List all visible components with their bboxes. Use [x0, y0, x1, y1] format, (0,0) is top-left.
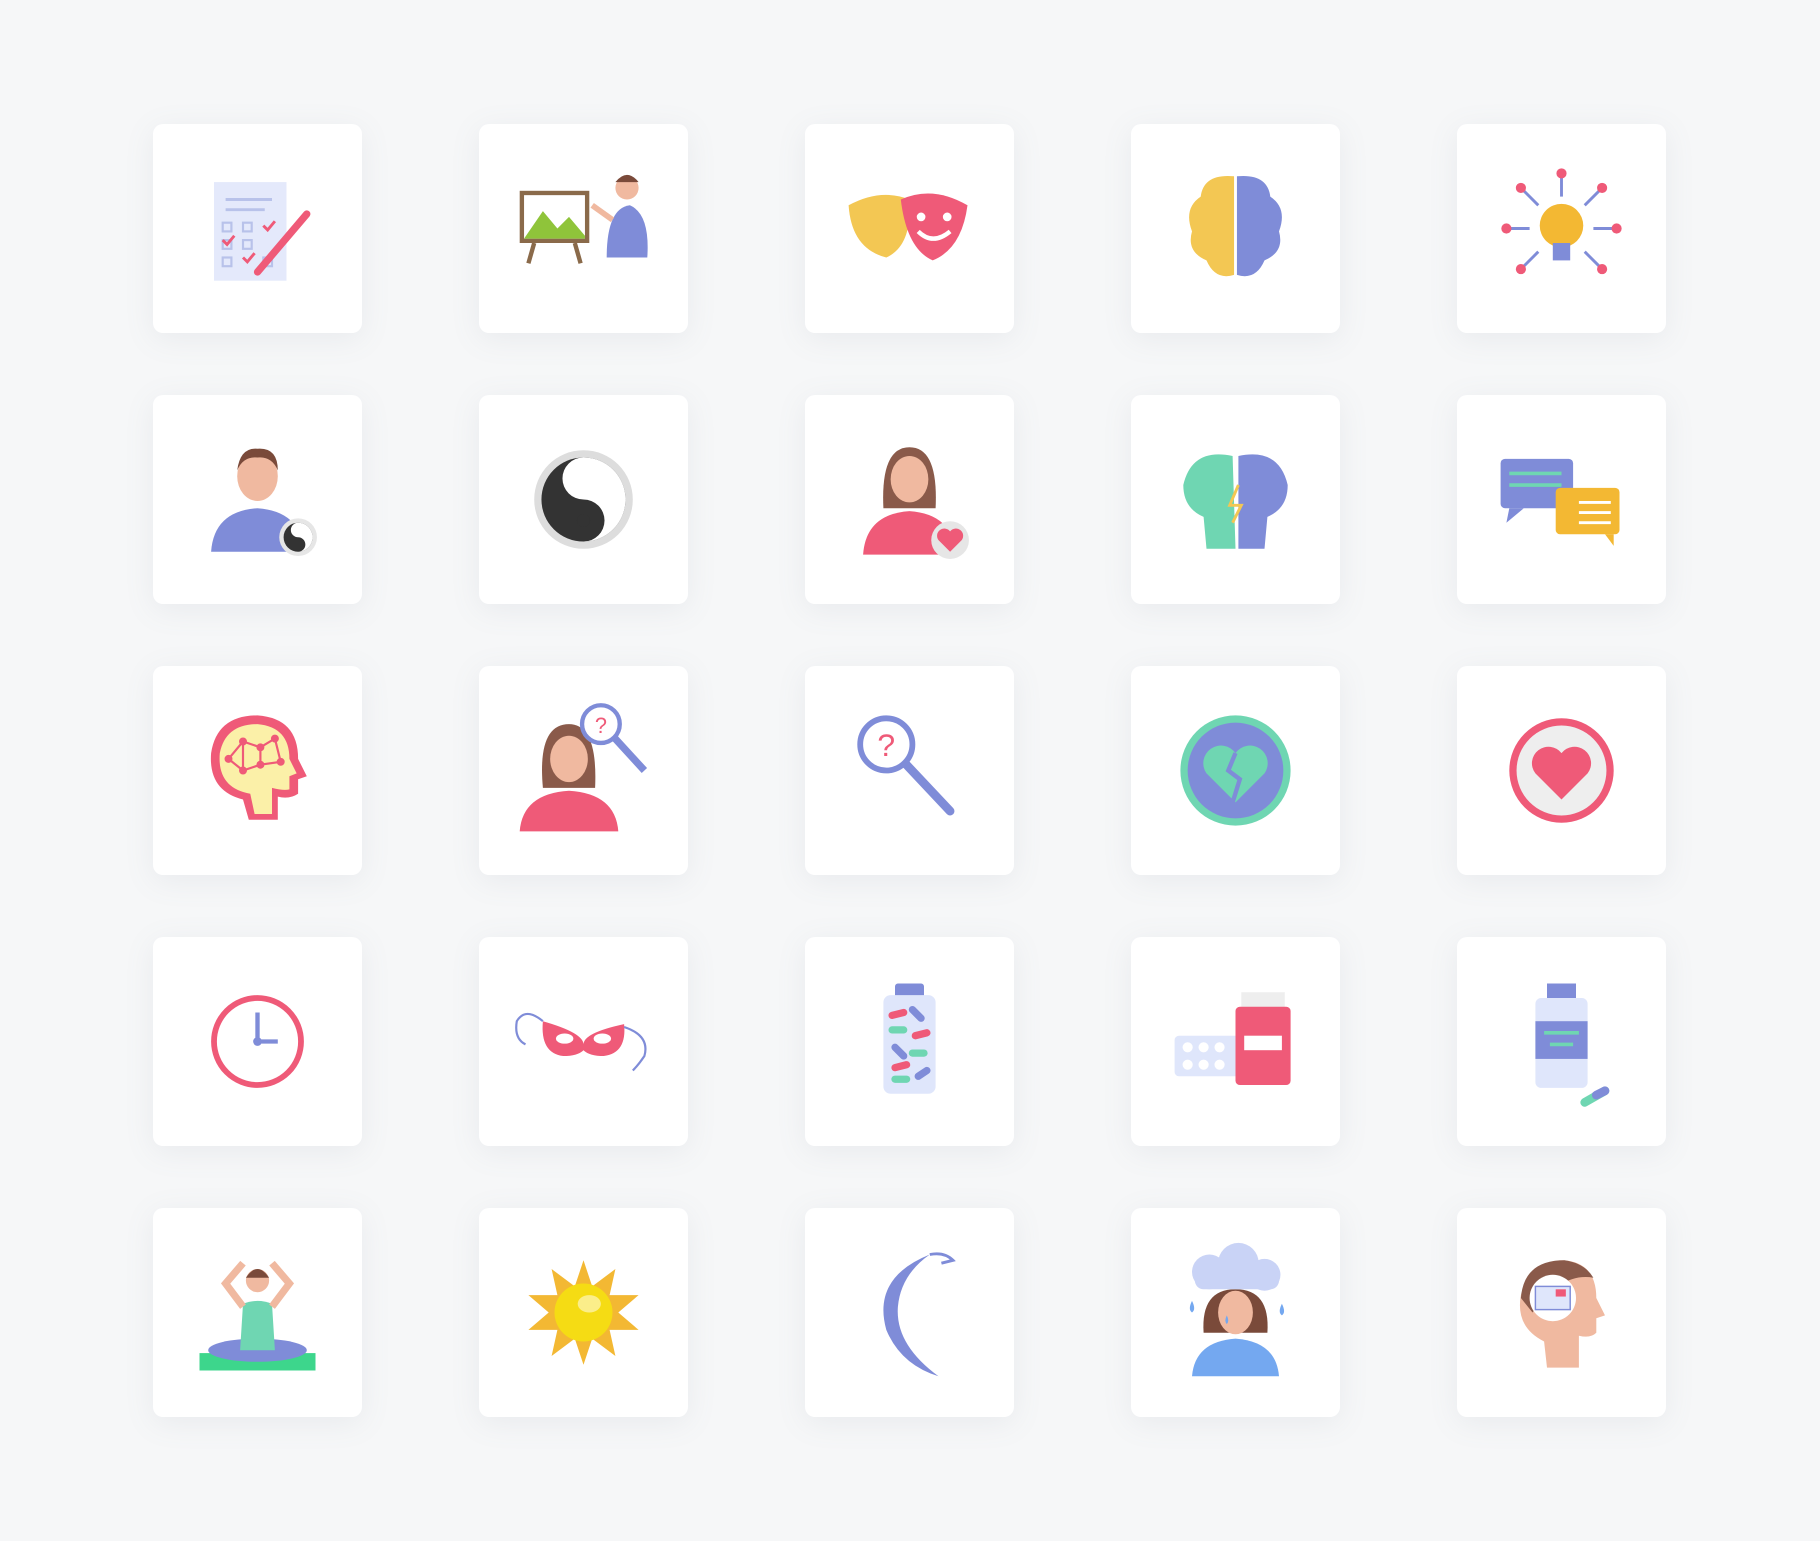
card: woman with magnifier	[479, 666, 688, 875]
card: broken heart	[1131, 666, 1340, 875]
card: mind head	[153, 666, 362, 875]
card: sun	[479, 1208, 688, 1417]
card: woman with heart	[805, 395, 1014, 604]
card: head with book	[1457, 1208, 1666, 1417]
card: chat bubbles	[1457, 395, 1666, 604]
card: yin-yang	[479, 395, 688, 604]
card: woman with magnifier: ?	[595, 713, 607, 738]
card: checklist	[153, 124, 362, 333]
card: sad woman under cloud	[1131, 1208, 1340, 1417]
card: magnifier question	[805, 666, 1014, 875]
card: brain	[1131, 124, 1340, 333]
card: theatre masks	[805, 124, 1014, 333]
card: crescent moon figure	[805, 1208, 1014, 1417]
card: magnifier question: ?	[877, 727, 895, 763]
card: idea bulb	[1457, 124, 1666, 333]
card: clock	[153, 937, 362, 1146]
card: medicine bottle and blister	[1131, 937, 1340, 1146]
card: pill jar	[805, 937, 1014, 1146]
card: carnival mask	[479, 937, 688, 1146]
card: two heads	[1131, 395, 1340, 604]
card: painter	[479, 124, 688, 333]
card: heart circle	[1457, 666, 1666, 875]
card: man with yin-yang	[153, 395, 362, 604]
card: bottle with capsule	[1457, 937, 1666, 1146]
card: meditation	[153, 1208, 362, 1417]
